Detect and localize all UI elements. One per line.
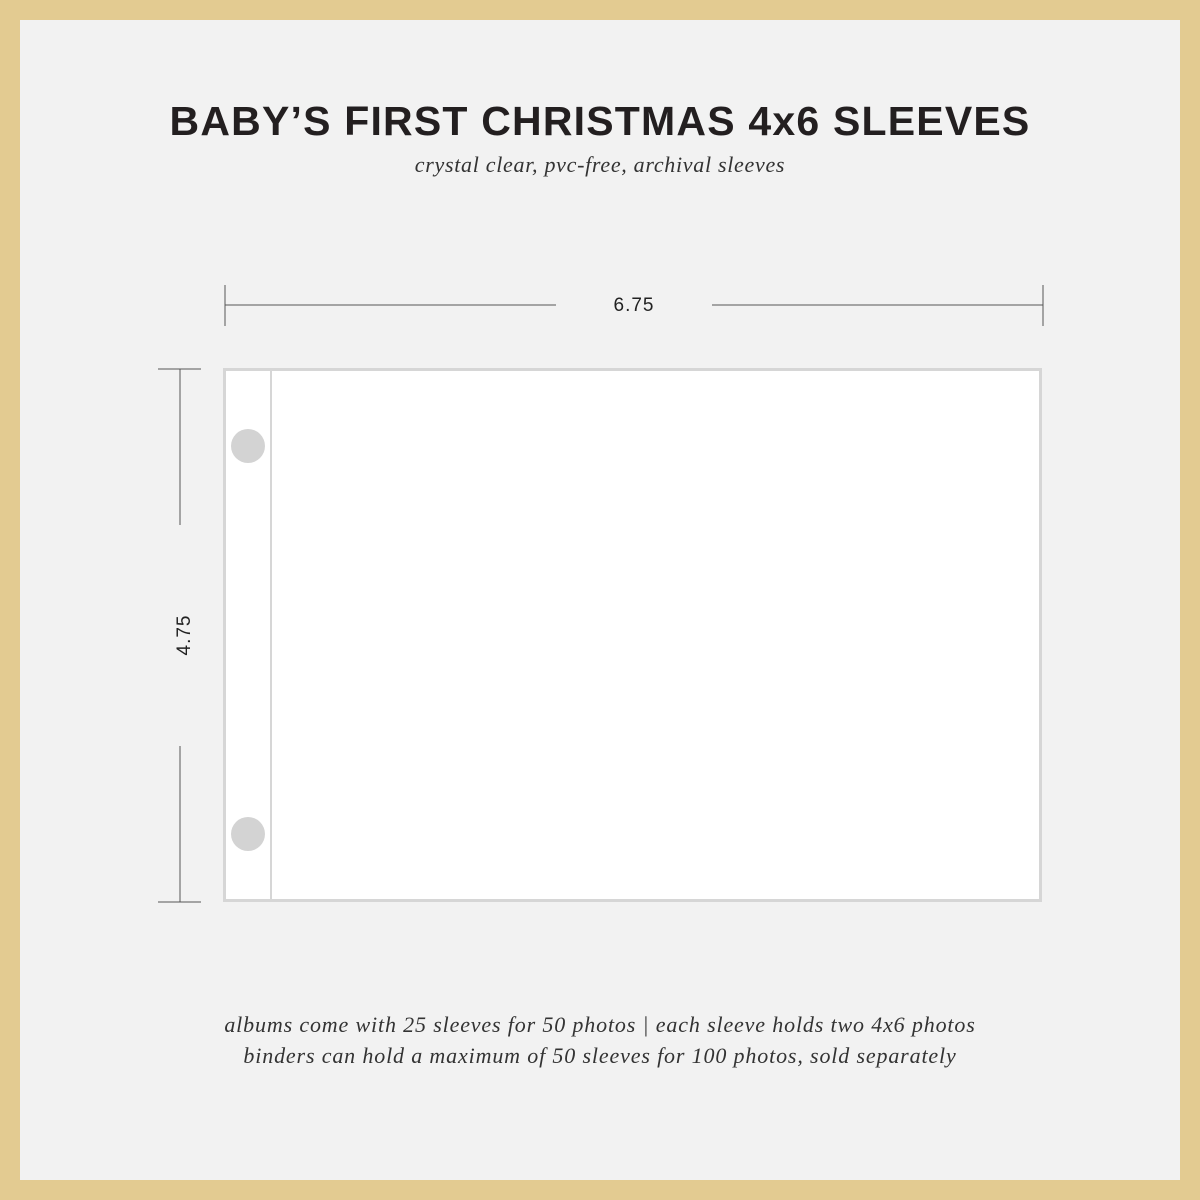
footer notes: binders can hold a maximum of 50 sleeves for 100 photos, sold separately [243,1043,957,1068]
footer notes: albums come with 25 sleeves for 50 photos | each sleeve holds two 4x6 photos [224,1012,976,1037]
subtitle: crystal clear, pvc-free, archival sleeves [415,152,785,177]
height dimension: 4.75 [174,615,195,655]
sleeve [224,369,1040,902]
width dimension: 6.75 [614,295,654,316]
title: BABY’S FIRST CHRISTMAS 4x6 SLEEVES [170,98,1030,144]
footer notes [224,1012,976,1068]
